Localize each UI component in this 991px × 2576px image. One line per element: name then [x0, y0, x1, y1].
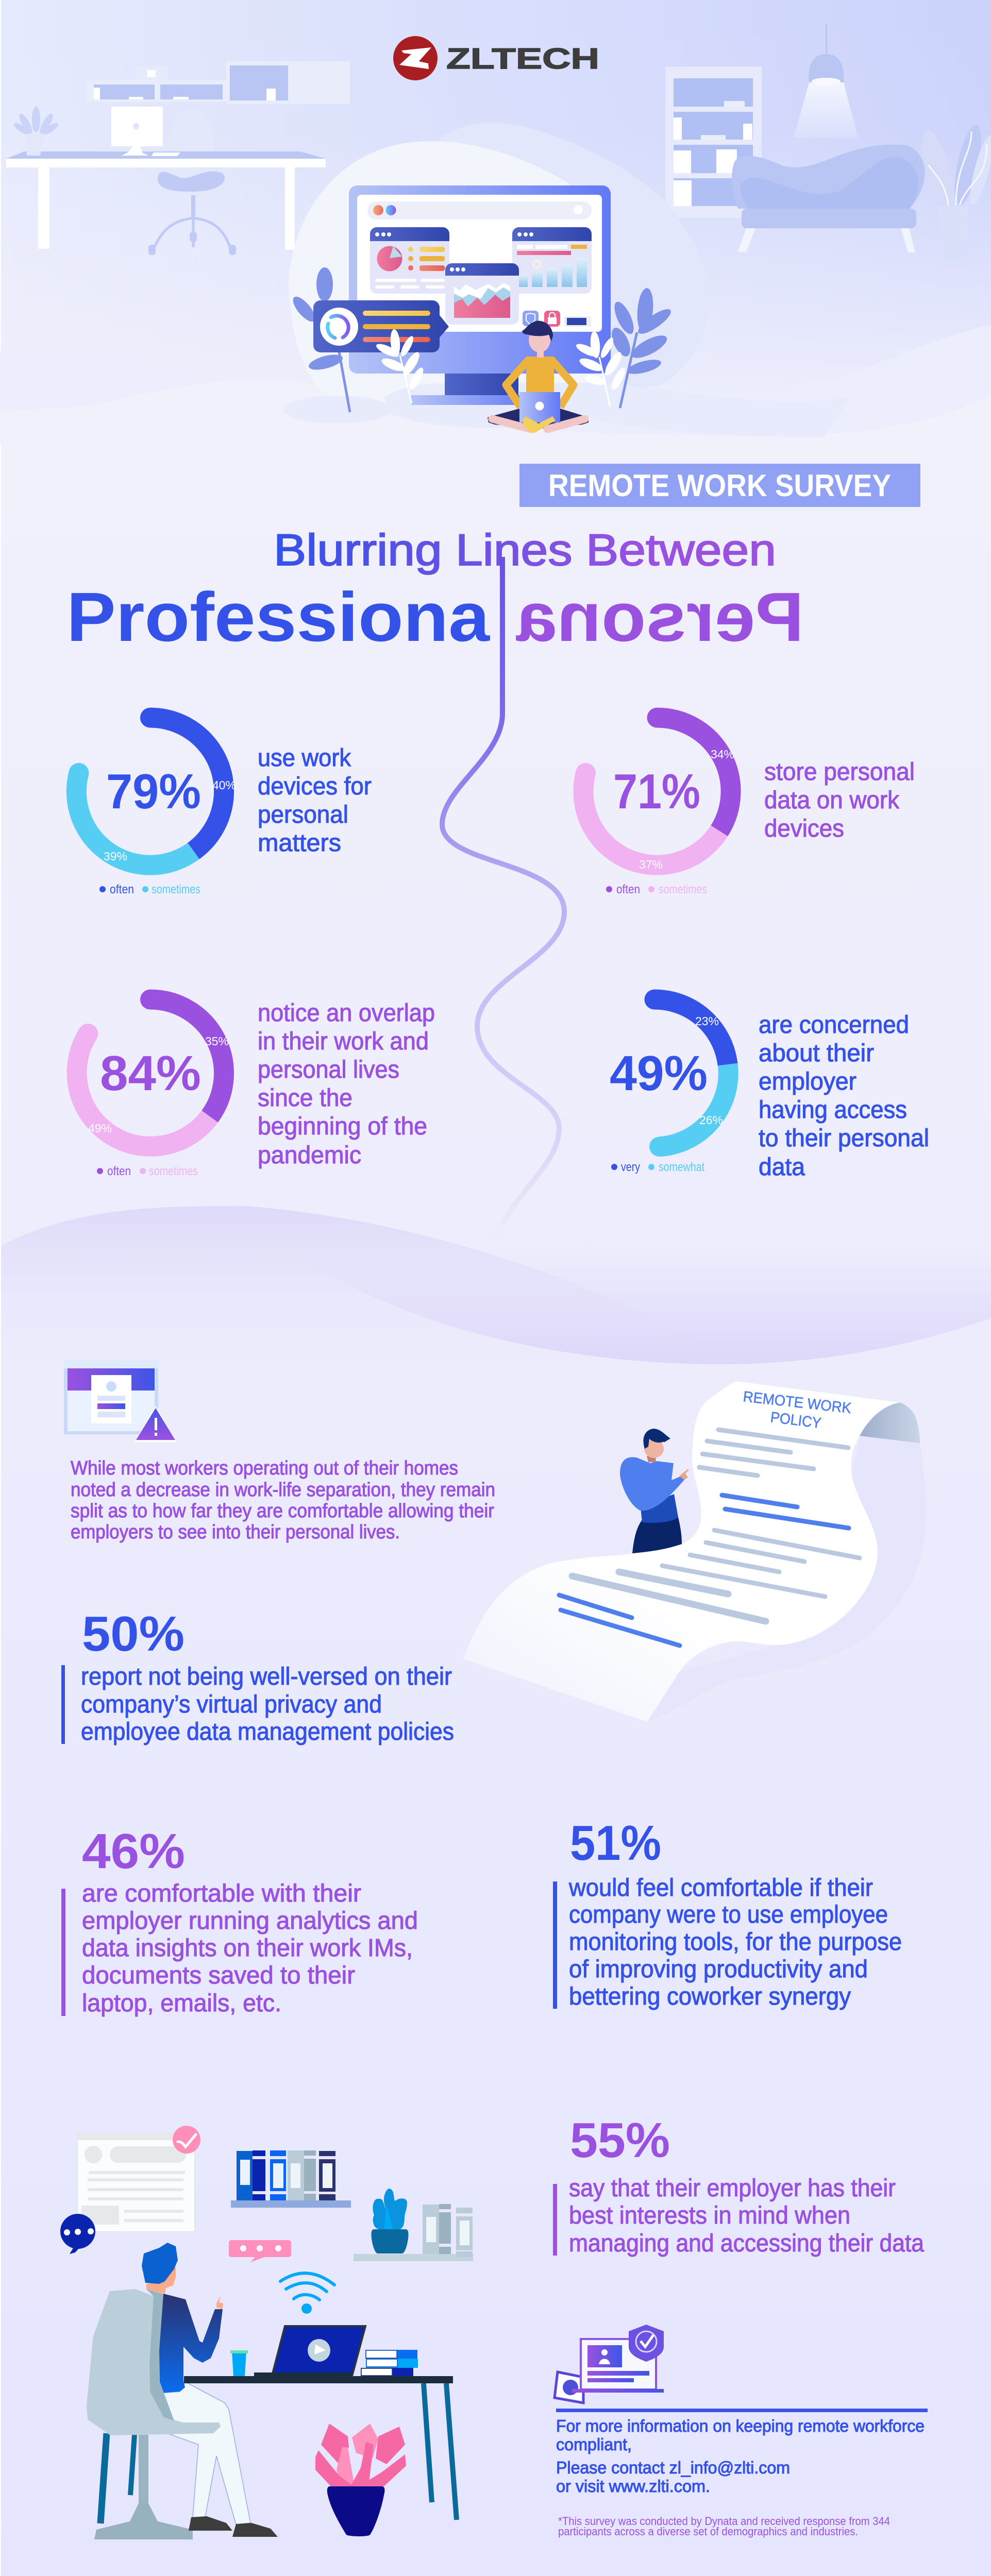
- icon: pink message: [229, 2240, 291, 2262]
- ground shapes: [283, 383, 850, 437]
- stat: 51%: of improving productivity and: [569, 1956, 868, 1983]
- dashboard panel middle: [445, 263, 519, 325]
- floor plant: [916, 123, 991, 263]
- illustration: office scene: [0, 24, 991, 443]
- donut chart: 71%: 37%: [639, 858, 663, 871]
- text: use work devices: [258, 744, 372, 857]
- paper curl: [860, 1402, 920, 1443]
- blob behind monitor: [289, 123, 709, 417]
- white plants: [375, 329, 628, 407]
- text: notice an overlap: [258, 999, 435, 1169]
- text: notice an overlap: pandemic: [258, 1142, 361, 1169]
- text: use work devices: devices for: [258, 773, 372, 800]
- donut chart: 79%: 39%: [104, 850, 127, 863]
- book shelf 1: [231, 2150, 351, 2208]
- text: use work devices: matters: [258, 829, 341, 857]
- scroll text lines: [559, 1430, 860, 1646]
- donut chart: 71%: 71%: [613, 764, 700, 819]
- stat: 51%: monitoring tools, for the purpose: [569, 1928, 902, 1956]
- shelf 2 with plant: [354, 2189, 473, 2261]
- survey footnote: *This survey was conducted by Dynata and received response from 344: [558, 2515, 890, 2528]
- text: store personal data: [764, 758, 915, 842]
- stat: 51%: [553, 1816, 902, 2010]
- stat: 46%: laptop, emails, etc.: [82, 1990, 281, 2017]
- logo: ZLTECH header: ZLTECH: [446, 42, 599, 75]
- desk with laptop: [184, 2326, 457, 2520]
- title word: Personal mirrored: Persona: [516, 578, 804, 656]
- document card: [77, 2133, 195, 2232]
- survey footnote: participants across a diverse set of demographics and industries.: [558, 2525, 858, 2538]
- text: use work devices: personal: [258, 801, 348, 828]
- contact rule: [556, 2409, 928, 2412]
- stat: 50%: 50%: [82, 1606, 184, 1662]
- survey banner: REMOTE WORK SURVEY: [548, 468, 891, 503]
- donut chart: 79%: [76, 708, 236, 865]
- legend: 84%: sometimes: [149, 1164, 198, 1178]
- title line 1: Blurring Lines Between: [274, 526, 776, 575]
- paper shadow: [647, 1436, 926, 1722]
- stat: 50%: employee data management policies: [81, 1718, 454, 1745]
- donut chart: 49%: 49%: [610, 1046, 708, 1101]
- legend: 79%: [99, 883, 200, 896]
- intro paragraph: employers to see into their personal lives.: [71, 1521, 400, 1543]
- stat: 55%: best interests in mind when: [569, 2202, 850, 2229]
- legend: 79%: sometimes: [152, 883, 200, 896]
- legend: 79%: often: [110, 883, 134, 896]
- stat: 55%: [553, 2113, 924, 2257]
- desk chair: [148, 109, 236, 255]
- scroll heading: REMOTE WORK: [742, 1388, 852, 1417]
- donut chart: 49%: 26%: [699, 1113, 723, 1127]
- survey footnote: [558, 2515, 890, 2538]
- text: store personal data: data on work: [764, 787, 900, 814]
- text: concerned about employer: about their: [759, 1040, 874, 1067]
- contact text: Please contact zl_info@zlti.com: [556, 2458, 790, 2477]
- section wave: [1, 1206, 991, 1364]
- donut chart: 84%: 84%: [100, 1046, 201, 1101]
- illustration: man at desk: [60, 2126, 473, 2539]
- pink potted plant: [315, 2424, 406, 2536]
- legend: 49%: [611, 1160, 704, 1174]
- stat: 50%: company’s virtual privacy and: [81, 1691, 382, 1718]
- stat: 50%: report not being well-versed on their: [81, 1663, 452, 1690]
- dashboard panel left: [370, 227, 449, 294]
- icon: profile window with warning: [64, 1360, 177, 1442]
- icon: contact profile with shield: [555, 2325, 664, 2403]
- donut chart: 49%: 23%: [695, 1014, 719, 1028]
- contact text: compliant,: [556, 2435, 632, 2454]
- legend: 49%: very: [621, 1160, 640, 1174]
- donut chart: 79%: 79%: [106, 764, 201, 819]
- stat: 51%: company were to use employee: [569, 1901, 888, 1928]
- donut chart: 84%: 35%: [205, 1035, 229, 1048]
- donut chart: 71%: 34%: [711, 748, 734, 761]
- contact text: or visit www.zlti.com.: [556, 2477, 710, 2496]
- stat: 55%: 55%: [570, 2113, 670, 2168]
- donut chart: 84%: 49%: [88, 1122, 112, 1135]
- intro paragraph: [71, 1458, 495, 1543]
- stat: 51%: bettering coworker synergy: [569, 1983, 851, 2010]
- text: concerned about employer: [759, 1011, 929, 1181]
- stat: 46%: documents saved to their: [82, 1962, 355, 1989]
- logo: ZLTECH header: [393, 36, 599, 80]
- seated person with laptop: [488, 321, 589, 433]
- small app icons: [523, 311, 591, 327]
- intro paragraph: noted a decrease in work-life separation, they remain: [71, 1479, 495, 1501]
- text: concerned about employer: to their personal: [759, 1125, 929, 1152]
- stat: 46%: 46%: [82, 1824, 185, 1879]
- text: store personal data: store personal: [764, 758, 915, 786]
- contact text: [556, 2416, 925, 2496]
- title word: Professional: Professiona: [66, 578, 490, 656]
- man reading: [620, 1429, 689, 1553]
- desk with computer: [6, 107, 326, 250]
- text: concerned about employer: having access: [759, 1096, 907, 1124]
- stat: 55%: say that their employer has their: [569, 2175, 896, 2202]
- text: notice an overlap: personal lives: [258, 1056, 399, 1083]
- background waves: [0, 325, 991, 443]
- left margin strip: [0, 0, 1, 2576]
- data callout: [313, 300, 449, 352]
- header background: [0, 0, 991, 443]
- blue plants behind monitor: [290, 267, 674, 412]
- icon: wifi: [280, 2273, 334, 2314]
- donut chart: 79%: 40%: [212, 778, 236, 792]
- stat: 46%: employer running analytics and: [82, 1907, 418, 1935]
- text: notice an overlap: notice an overlap: [258, 999, 435, 1027]
- donut chart: 84%: [77, 989, 229, 1146]
- contact text: For more information on keeping remote workforce: [556, 2416, 925, 2435]
- dashboard panel right: [512, 227, 592, 294]
- bookcase: [665, 66, 762, 218]
- intro paragraph: While most workers operating out of their homes: [71, 1458, 458, 1479]
- scroll heading: POLICY: [769, 1409, 822, 1432]
- plant on desk: [12, 107, 60, 156]
- text: concerned about employer: employer: [759, 1068, 856, 1095]
- wall shelf left: [87, 61, 350, 104]
- person on chair: [87, 2243, 278, 2539]
- intro paragraph: split as to how far they are comfortable allowing their: [71, 1500, 494, 1522]
- stat: 46%: [61, 1824, 418, 2017]
- stat: 51%: would feel comfortable if their: [568, 1874, 873, 1902]
- donut chart: 71%: [583, 708, 734, 871]
- legend: 71%: [606, 883, 707, 896]
- donut chart: 49%: [610, 989, 728, 1157]
- icon: pink check: [173, 2126, 200, 2154]
- armchair: [732, 145, 925, 252]
- text: notice an overlap: since the: [258, 1084, 352, 1112]
- stat: 46%: data insights on their work IMs,: [82, 1935, 413, 1962]
- stat: 51%: 51%: [570, 1816, 661, 1871]
- legend: 84%: [97, 1164, 198, 1178]
- stat: 50%: [61, 1606, 454, 1745]
- illustration: remote work policy scroll: [463, 1381, 926, 1722]
- pendant lamp: [794, 24, 858, 138]
- text: store personal data: devices: [764, 815, 844, 842]
- legend: 71%: often: [616, 883, 640, 896]
- legend: 71%: sometimes: [659, 883, 707, 896]
- legend: 84%: often: [107, 1164, 131, 1178]
- text: concerned about employer: are concerned: [759, 1011, 909, 1039]
- paper sheet: [463, 1381, 899, 1722]
- text: notice an overlap: beginning of the: [258, 1113, 427, 1140]
- text: use work devices: use work: [258, 744, 351, 772]
- stat: 55%: managing and accessing their data: [569, 2230, 924, 2257]
- monitor: [349, 185, 611, 405]
- text: concerned about employer: data: [759, 1154, 805, 1181]
- blurring line: [442, 557, 564, 1242]
- text: notice an overlap: in their work and: [258, 1028, 429, 1055]
- stat: 46%: are comfortable with their: [82, 1880, 361, 1907]
- scroll heading: [742, 1388, 852, 1432]
- icon: blue speech bubble: [60, 2214, 95, 2254]
- legend: 49%: somewhat: [659, 1160, 704, 1174]
